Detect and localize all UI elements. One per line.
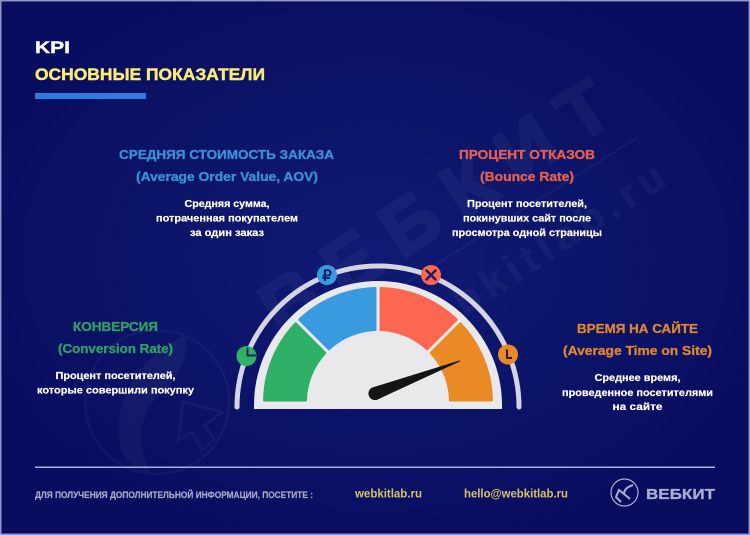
text block: average order value: (Average Order Value, AOV) [136, 169, 318, 184]
gauge dial [254, 281, 502, 409]
text block: average order value: Средняя сумма, [184, 198, 270, 210]
text block: average order value: СРЕДНЯЯ СТОИМОСТЬ ЗАКАЗА [119, 147, 335, 162]
text block: average order value: за один заказ [190, 227, 264, 239]
title [35, 38, 265, 84]
icon: cross [421, 265, 441, 285]
segment: blue [299, 288, 375, 349]
footer contacts: ДЛЯ ПОЛУЧЕНИЯ ДОПОЛНИТЕЛЬНОЙ ИНФОРМАЦИИ, ПОСЕТИТЕ : [35, 489, 313, 500]
text block: average time on site: на сайте [612, 401, 663, 413]
text block: average order value [119, 147, 335, 239]
icon: pie chart [236, 346, 256, 366]
text block: bounce rate: (Bounce Rate) [480, 169, 574, 184]
text block: bounce rate [452, 147, 602, 239]
text block: conversion rate: Процент посетителей, [56, 370, 176, 382]
text block: average time on site: Среднее время, [594, 372, 681, 384]
icon: ruble: ₽ [322, 268, 332, 284]
text block: conversion rate: (Conversion Rate) [58, 341, 173, 356]
segment: red [381, 288, 457, 349]
segment: green [264, 323, 325, 400]
text block: average time on site: проведенное посетителями [562, 387, 713, 399]
text block: average order value: потраченная покупателем [156, 212, 298, 224]
gauge chart [236, 265, 519, 409]
text block: average time on site: ВРЕМЯ НА САЙТЕ [577, 321, 698, 336]
title accent bar [35, 93, 146, 99]
text block: average time on site [562, 321, 713, 413]
title: KPI [35, 38, 70, 57]
outer arc [237, 266, 519, 407]
text block: conversion rate: которые совершили покупку [37, 384, 194, 396]
title: ОСНОВНЫЕ ПОКАЗАТЕЛИ [35, 66, 265, 84]
footer contacts: hello@webkitlab.ru [464, 488, 568, 500]
text block: bounce rate: просмотра одной страницы [452, 227, 602, 239]
logo: ВЕБКИТ [646, 486, 715, 503]
text block: conversion rate [37, 319, 194, 396]
segment: orange [431, 323, 492, 400]
text: webkitlab.ru [388, 155, 673, 361]
footer contacts: webkitlab.ru [354, 488, 422, 500]
text block: conversion rate: КОНВЕРСИЯ [73, 319, 158, 334]
logo [611, 479, 715, 506]
text: ВЕБКИТ [245, 63, 627, 352]
footer divider [35, 466, 715, 468]
text block: bounce rate: Процент посетителей, [467, 198, 587, 210]
text block: bounce rate: ПРОЦЕНТ ОТКАЗОВ [459, 147, 595, 162]
text block: bounce rate: покинувших сайт после [463, 212, 591, 224]
text block: average time on site: (Average Time on Site) [563, 343, 712, 358]
icon: ruble [317, 265, 337, 285]
footer contacts [35, 488, 568, 500]
gauge needle [369, 361, 460, 400]
icon: clock [498, 344, 518, 364]
